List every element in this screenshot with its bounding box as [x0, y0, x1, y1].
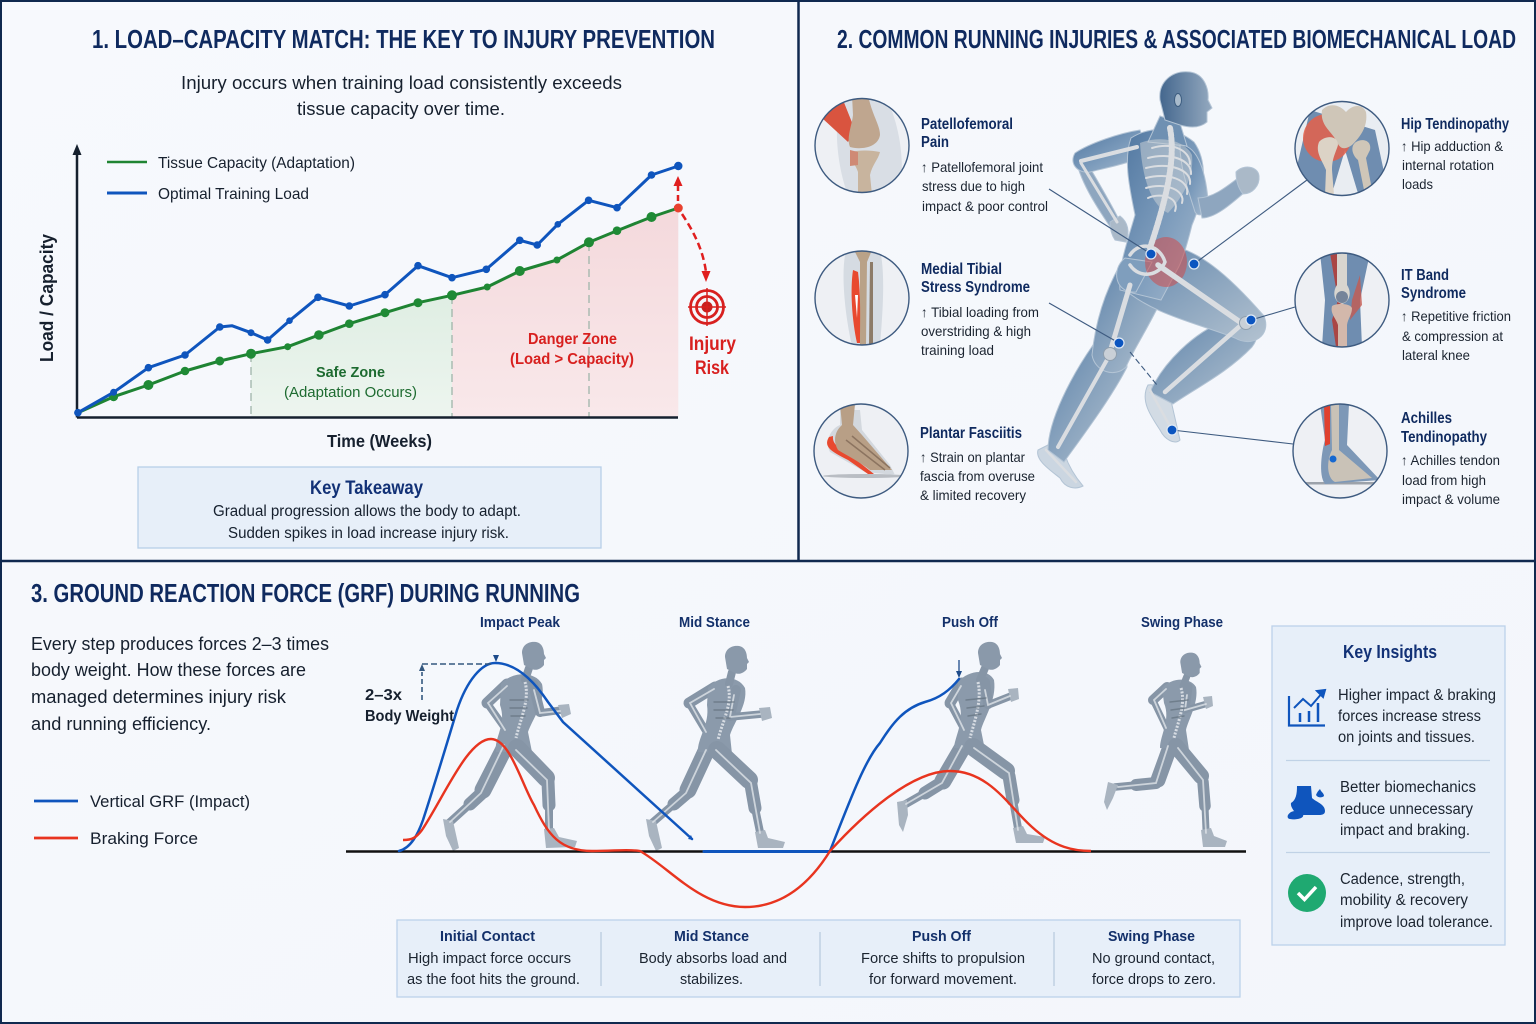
- callout: key takeaway: Gradual progression allows the body to adapt.: [213, 503, 521, 520]
- insight 2: reduce unnecessary: [1340, 801, 1473, 818]
- phase labels: Mid Stance: [679, 614, 750, 631]
- danger zone label: Danger Zone: [528, 331, 617, 348]
- tissue capacity line: [78, 208, 678, 413]
- initial contact: Initial Contact: [440, 928, 535, 945]
- phase labels: Impact Peak: [480, 614, 561, 631]
- mid stance: stabilizes.: [680, 971, 743, 988]
- text: hip tendinopathy: internal rotation: [1402, 157, 1494, 173]
- panel: load-capacity match: [37, 24, 736, 548]
- callout: key takeaway: [138, 467, 601, 548]
- text: IT band syndrome: IT Band: [1401, 267, 1449, 284]
- icon: target: [688, 288, 726, 326]
- text: patellofemoral pain: [921, 116, 1048, 214]
- risk arrows: [674, 176, 710, 282]
- icon: IT band knee: [1295, 253, 1389, 347]
- insight 2: Better biomechanics: [1340, 779, 1476, 796]
- phase labels: [480, 614, 1223, 631]
- body weight label: 2–3x: [365, 687, 402, 704]
- text: patellofemoral pain: ↑ Patellofemoral joint: [921, 159, 1043, 175]
- danger zone label: (Load > Capacity): [510, 351, 634, 368]
- push off: for forward movement.: [869, 971, 1017, 988]
- text: IT band syndrome: ↑ Repetitive friction: [1401, 308, 1511, 324]
- text: IT band syndrome: lateral knee: [1402, 347, 1470, 363]
- panel: key insights: [1272, 626, 1505, 945]
- insight 1: [1338, 687, 1496, 746]
- insight 3: Cadence, strength,: [1340, 871, 1465, 888]
- text: plantar fasciitis: Plantar Fasciitis: [920, 425, 1022, 442]
- text: IT band syndrome: Syndrome: [1401, 285, 1466, 302]
- y axis label: Load / Capacity: [37, 234, 57, 362]
- legend: Tissue Capacity (Adaptation): [158, 155, 355, 172]
- text: plantar fasciitis: fascia from overuse: [920, 468, 1035, 484]
- leader lines: [1049, 180, 1307, 444]
- legend: [34, 792, 250, 848]
- text: hip tendinopathy: Hip Tendinopathy: [1401, 116, 1509, 133]
- injury risk label: Risk: [695, 358, 729, 379]
- insight 1: forces increase stress: [1338, 708, 1481, 725]
- swing phase: force drops to zero.: [1092, 971, 1216, 988]
- phase labels: Push Off: [942, 614, 999, 631]
- safe zone label: [284, 364, 417, 401]
- initial contact: High impact force occurs: [408, 950, 571, 967]
- text: medial tibial stress syndrome: [921, 261, 1039, 358]
- runner: push off: [897, 642, 1045, 843]
- intro paragraph: managed determines injury risk: [31, 687, 287, 707]
- insight 3: [1340, 871, 1493, 931]
- text: achilles tendinopathy: impact & volume: [1402, 491, 1500, 507]
- initial contact: [407, 928, 580, 988]
- training load line: [74, 162, 683, 417]
- heading 1: 1. LOAD–CAPACITY MATCH: THE KEY TO INJURY PREVENTION: [92, 24, 715, 54]
- intro paragraph: Every step produces forces 2–3 times: [31, 634, 329, 654]
- axes: [72, 144, 678, 418]
- icon: rising chart: [1289, 690, 1325, 726]
- mid stance: Mid Stance: [674, 928, 749, 945]
- callout: key takeaway: Sudden spikes in load increase injury risk.: [228, 525, 509, 542]
- text: patellofemoral pain: impact & poor control: [922, 198, 1048, 214]
- baseline: [346, 850, 1246, 853]
- highlighted hip region: [1145, 237, 1187, 287]
- text: hip tendinopathy: ↑ Hip adduction &: [1401, 138, 1504, 154]
- insight 1: on joints and tissues.: [1338, 729, 1475, 746]
- text: achilles tendinopathy: Tendinopathy: [1401, 429, 1487, 446]
- push off: [861, 928, 1025, 988]
- danger zone area: [452, 208, 678, 417]
- text: medial tibial stress syndrome: Medial Tibial: [921, 261, 1002, 278]
- x axis label: Time (Weeks): [327, 431, 432, 451]
- phase labels: Swing Phase: [1141, 614, 1223, 631]
- legend: Vertical GRF (Impact): [90, 792, 250, 811]
- text: IT band syndrome: [1401, 267, 1511, 363]
- icon: hip joint: [1295, 102, 1390, 200]
- force curve chart: [346, 655, 1246, 907]
- mid stance: Body absorbs load and: [639, 950, 787, 967]
- insight 3: improve load tolerance.: [1340, 914, 1493, 931]
- text: achilles tendinopathy: load from high: [1402, 472, 1486, 488]
- heading 3: 3. GROUND REACTION FORCE (GRF) DURING RUNNING: [31, 578, 580, 608]
- insight 3: mobility & recovery: [1340, 892, 1468, 909]
- legend: Braking Force: [90, 829, 198, 848]
- safe zone label: (Adaptation Occurs): [284, 384, 417, 401]
- text: achilles tendinopathy: [1401, 410, 1500, 507]
- marker dots: [1114, 249, 1256, 435]
- runner: swing phase: [1104, 653, 1227, 847]
- panel: key insights: Key Insights: [1343, 642, 1437, 662]
- vertical GRF curve: [399, 663, 959, 852]
- intro paragraph: and running efficiency.: [31, 714, 211, 734]
- mid stance: [639, 928, 787, 988]
- icon: shin: [815, 250, 909, 346]
- injury risk label: Injury: [689, 334, 736, 355]
- intro text: [181, 72, 622, 119]
- icon: check badge: [1288, 874, 1326, 912]
- ear: [1174, 94, 1182, 106]
- panel: common running injuries: [814, 24, 1516, 507]
- phase description box: [397, 920, 1240, 997]
- safe zone label: Safe Zone: [316, 364, 385, 381]
- intro text: tissue capacity over time.: [297, 98, 505, 119]
- intro paragraph: [31, 634, 329, 734]
- text: IT band syndrome: & compression at: [1402, 328, 1503, 344]
- insight 2: impact and braking.: [1340, 822, 1470, 839]
- safe zone area: [251, 295, 452, 417]
- anatomical runner figure: [1038, 72, 1266, 488]
- text: patellofemoral pain: Patellofemoral: [921, 116, 1013, 133]
- body weight label: [365, 687, 455, 725]
- injury risk label: [689, 334, 736, 379]
- text: medial tibial stress syndrome: training load: [921, 342, 994, 358]
- intro paragraph: body weight. How these forces are: [31, 660, 306, 680]
- braking force curve: [403, 739, 1091, 907]
- insight 1: Higher impact & braking: [1338, 687, 1496, 704]
- line chart: load vs capacity: [37, 144, 736, 451]
- panel: ground reaction force: [31, 578, 1505, 997]
- icon: achilles ankle: [1293, 404, 1387, 498]
- initial contact: as the foot hits the ground.: [407, 971, 580, 988]
- peak annotation: [419, 655, 962, 700]
- insight 2: [1340, 779, 1476, 839]
- text: hip tendinopathy: [1401, 116, 1509, 192]
- text: plantar fasciitis: & limited recovery: [920, 487, 1026, 503]
- swing phase: Swing Phase: [1108, 928, 1195, 945]
- text: patellofemoral pain: Pain: [921, 134, 949, 151]
- push off: Push Off: [912, 928, 972, 945]
- swing phase: [1092, 928, 1216, 988]
- icon: patellofemoral knee: [815, 95, 909, 195]
- text: plantar fasciitis: ↑ Strain on plantar: [920, 449, 1025, 465]
- text: achilles tendinopathy: ↑ Achilles tendon: [1401, 452, 1500, 468]
- icon: plantar fascia foot: [814, 404, 908, 498]
- runner: impact peak: [443, 642, 577, 851]
- icon: foot: [1288, 786, 1325, 819]
- text: patellofemoral pain: stress due to high: [922, 178, 1025, 194]
- text: medial tibial stress syndrome: Stress Syndrome: [921, 279, 1030, 296]
- push off: Force shifts to propulsion: [861, 950, 1025, 967]
- text: hip tendinopathy: loads: [1402, 176, 1433, 192]
- text: plantar fasciitis: [920, 425, 1035, 503]
- text: medial tibial stress syndrome: overstriding & high: [921, 323, 1031, 339]
- swing phase: No ground contact,: [1092, 950, 1215, 967]
- legend: [107, 155, 355, 203]
- intro text: Injury occurs when training load consistently exceeds: [181, 72, 622, 93]
- callout: key takeaway: Key Takeaway: [310, 478, 423, 499]
- text: medial tibial stress syndrome: ↑ Tibial loading from: [921, 304, 1039, 320]
- runner: mid stance: [646, 646, 785, 851]
- body weight label: Body Weight: [365, 708, 455, 725]
- legend: Optimal Training Load: [158, 186, 309, 203]
- danger zone label: [510, 331, 634, 368]
- text: achilles tendinopathy: Achilles: [1401, 410, 1452, 427]
